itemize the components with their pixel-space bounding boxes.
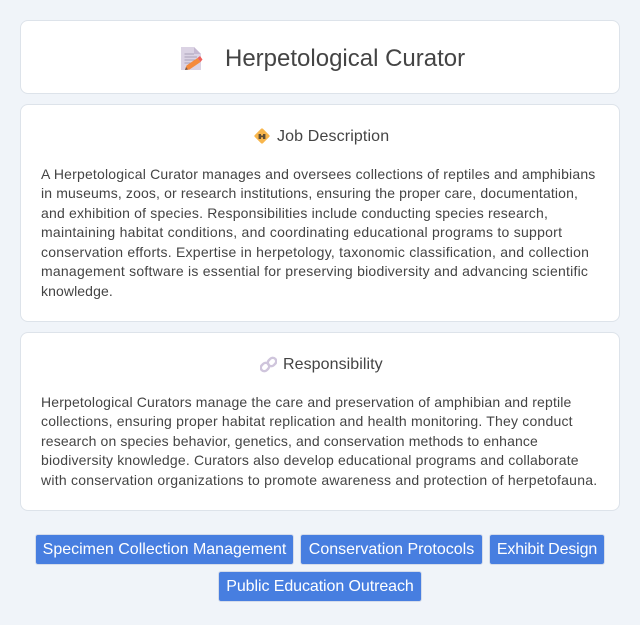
tag: public education outreach: Public Education Outreach bbox=[226, 578, 414, 595]
tag: specimen collection management: Specimen Collection Management bbox=[43, 541, 286, 558]
heading: responsibility: Responsibility bbox=[283, 356, 383, 373]
icon: chain link bbox=[260, 356, 277, 372]
panel: title card bbox=[20, 20, 620, 94]
icon: job description diamond bbox=[254, 128, 270, 144]
text block: job description: in museums, zoos, or research institutions, ensuring the proper care, documentation, bbox=[41, 185, 578, 201]
panel: job description bbox=[20, 104, 620, 322]
text block: job description bbox=[41, 166, 596, 299]
tag: conservation protocols: Conservation Protocols bbox=[309, 541, 474, 558]
text block: job description: A Herpetological Curator manages and oversees collections of reptiles and amphibians bbox=[41, 166, 596, 182]
tag: public education outreach bbox=[218, 571, 422, 602]
icon: document with pencil bbox=[181, 47, 202, 70]
panel: responsibility bbox=[20, 332, 620, 511]
text block: job description: management software is essential for preserving biodiversity and advancing scientific bbox=[41, 263, 588, 279]
heading: job description: Job Description bbox=[277, 128, 389, 145]
text block: responsibility: with conservation organizations to promote awareness and protection of herpetofauna. bbox=[41, 472, 597, 488]
title: Herpetological Curator bbox=[225, 45, 465, 72]
tag: conservation protocols bbox=[300, 534, 483, 565]
text block: responsibility bbox=[41, 394, 597, 488]
text block: responsibility: biodiversity knowledge. Curators also develop educational programs and collaborate bbox=[41, 452, 579, 468]
text block: responsibility: collections, ensuring proper habitat replication and health monitoring. They conduct bbox=[41, 413, 573, 429]
text block: job description: maintaining habitat conditions, and coordinating educational programs to support bbox=[41, 224, 562, 240]
tag: exhibit design: Exhibit Design bbox=[497, 541, 597, 558]
text block: responsibility: research on species behavior, genetics, and conservation methods to enhance bbox=[41, 433, 538, 449]
text block: job description: knowledge. bbox=[41, 283, 113, 299]
text block: responsibility: Herpetological Curators manage the care and preservation of amphibian and reptile bbox=[41, 394, 572, 410]
tag: exhibit design bbox=[489, 534, 605, 565]
text block: job description: conservation efforts. Expertise in herpetology, taxonomic classification, and collection bbox=[41, 244, 589, 260]
text block: job description: and exhibition of species. Responsibilities include conducting species research, bbox=[41, 205, 548, 221]
tag: specimen collection management bbox=[35, 534, 294, 565]
